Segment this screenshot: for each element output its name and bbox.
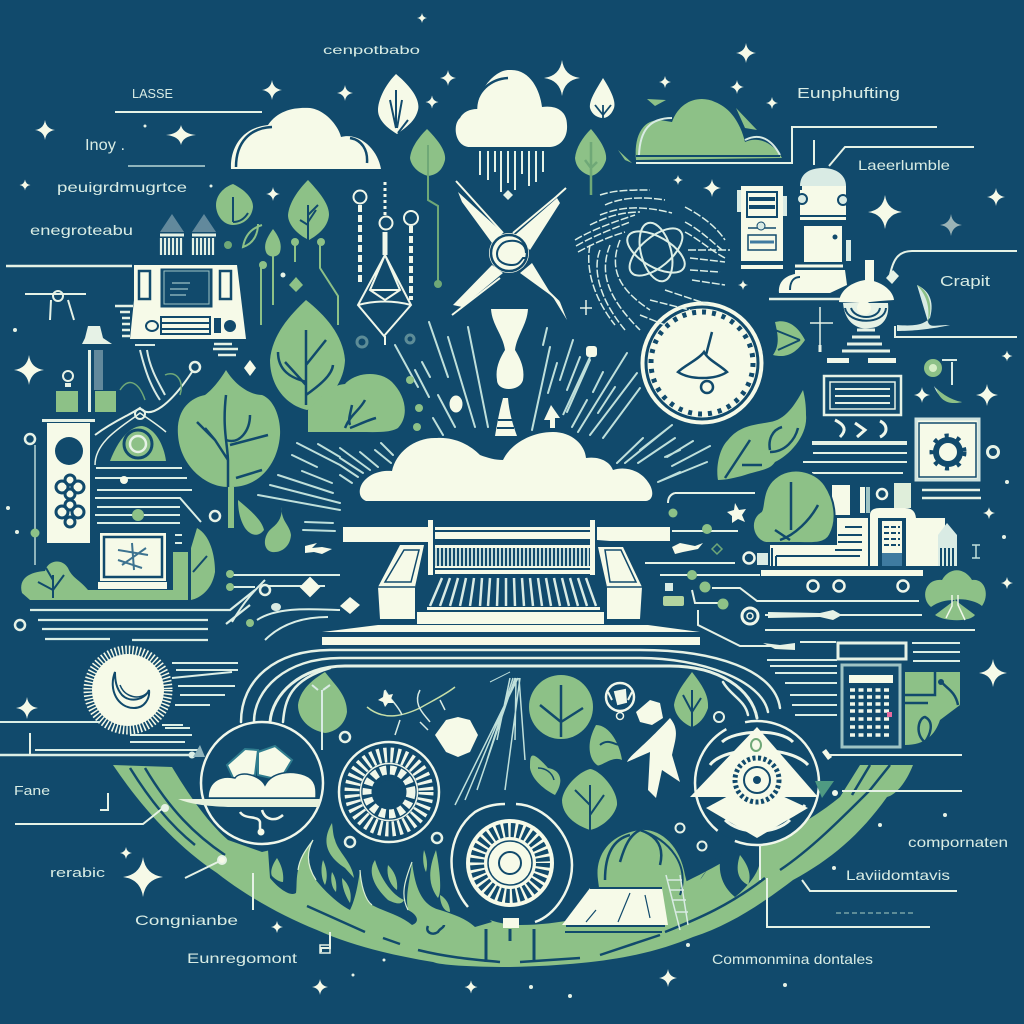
tent / mat with dome at bottom — [562, 712, 957, 932]
speaker tower — [25, 419, 95, 565]
top centre cloud with rain — [456, 70, 567, 200]
robot body — [800, 168, 846, 186]
pylon with three antennas — [354, 182, 418, 347]
leaf green centre left — [410, 129, 445, 176]
central machine on platform — [322, 432, 700, 645]
bottom circle: clouds on a dish — [178, 722, 323, 844]
machine body — [343, 520, 670, 624]
screen — [161, 269, 212, 307]
label: LASSE: LASSE — [132, 86, 173, 101]
bottom circle: mandala — [339, 732, 442, 847]
leaf white veins — [390, 90, 408, 133]
platform bar — [761, 570, 923, 576]
leaf green stem — [428, 145, 438, 282]
domes on top — [160, 214, 216, 255]
tree at factory — [753, 471, 835, 543]
label: enegroteabu: enegroteabu — [30, 222, 133, 238]
label: Laviidomtavis: Laviidomtavis — [846, 867, 950, 883]
band lines — [130, 765, 890, 962]
top leaves — [378, 74, 615, 288]
right flame lobe — [700, 845, 760, 897]
green flames inside lobes — [271, 823, 450, 912]
label: Eunregomont: Eunregomont — [187, 950, 297, 966]
robot and cabinet — [737, 140, 974, 299]
label: Inoy: Inoy . — [85, 137, 125, 154]
chimney flask and green blocks — [56, 326, 116, 412]
small turbine — [25, 291, 86, 320]
right green orb and horn — [924, 359, 962, 403]
burst pattern and small vines — [367, 672, 525, 805]
small green tree — [925, 570, 986, 607]
label: peuigrdmugrtce: peuigrdmugrtce — [57, 179, 187, 195]
radial floor stripes — [430, 578, 596, 606]
cream flame edges — [298, 840, 412, 910]
label: Fane: Fane — [14, 783, 50, 798]
leaf green centre right — [575, 129, 606, 176]
label: cenpotbabo: cenpotbabo — [323, 43, 420, 57]
camera on stand — [773, 260, 896, 363]
leaf white right veins — [595, 105, 611, 120]
laptop and bush left — [21, 528, 215, 600]
atom with swirl lines — [575, 190, 730, 330]
circuit lines — [645, 493, 975, 646]
green eye and circuit vines — [95, 360, 256, 465]
leaf stem right — [585, 142, 597, 195]
label: Commonmina dontales: Commonmina dontales — [712, 951, 873, 967]
label: rerabic: rerabic — [50, 865, 106, 880]
large leaf — [717, 390, 806, 480]
framed square — [916, 419, 979, 480]
upper tree with bush — [270, 300, 405, 432]
calculator block — [767, 642, 962, 796]
label: Crapit: Crapit — [940, 273, 991, 290]
top right green cloud — [618, 99, 937, 163]
label: Eunphufting: Eunphufting — [797, 85, 900, 102]
sun with crescent moon — [0, 650, 238, 758]
left cluster of small leaves and stems — [216, 180, 338, 325]
factory — [832, 485, 850, 515]
tiles — [227, 746, 292, 782]
cabinet — [741, 186, 783, 261]
radiating rays — [258, 322, 710, 531]
antenna — [814, 140, 974, 166]
label: Laeerlumble: Laeerlumble — [858, 157, 950, 173]
body — [130, 265, 246, 339]
green crescent base with flames — [113, 765, 913, 967]
callout leaders and small notes — [15, 112, 915, 953]
chevrons — [835, 420, 886, 437]
left retro console machine — [6, 214, 246, 400]
label: compornaten: compornaten — [908, 834, 1008, 850]
big tree left — [178, 370, 332, 554]
leaf white right — [590, 78, 615, 118]
crossed blades propeller — [452, 181, 567, 320]
box with lines — [824, 376, 901, 415]
cloud above machine — [360, 432, 652, 501]
emblem circle with triangle and gear — [690, 721, 834, 845]
flame lobes — [262, 828, 313, 894]
left horizontal lines and nodes — [15, 468, 360, 640]
dish — [178, 799, 320, 807]
label: Congnianbe: Congnianbe — [135, 912, 238, 928]
base plate — [322, 625, 700, 645]
leaf white left — [378, 74, 418, 134]
bottom circle: gear wheel — [452, 804, 572, 962]
gauge dial — [642, 303, 762, 423]
crapit callout with green curl — [886, 251, 1017, 337]
right stripes and factory — [640, 376, 998, 650]
leader line — [6, 265, 132, 267]
bottom leaves middle — [298, 672, 708, 832]
slats — [436, 548, 588, 566]
top left cloud — [231, 108, 381, 169]
wavy stripes — [812, 441, 907, 445]
puffs — [208, 772, 316, 798]
main concentric flow lines — [241, 650, 780, 722]
exclamation shape and small rocket — [406, 309, 597, 436]
console controls — [161, 317, 210, 334]
